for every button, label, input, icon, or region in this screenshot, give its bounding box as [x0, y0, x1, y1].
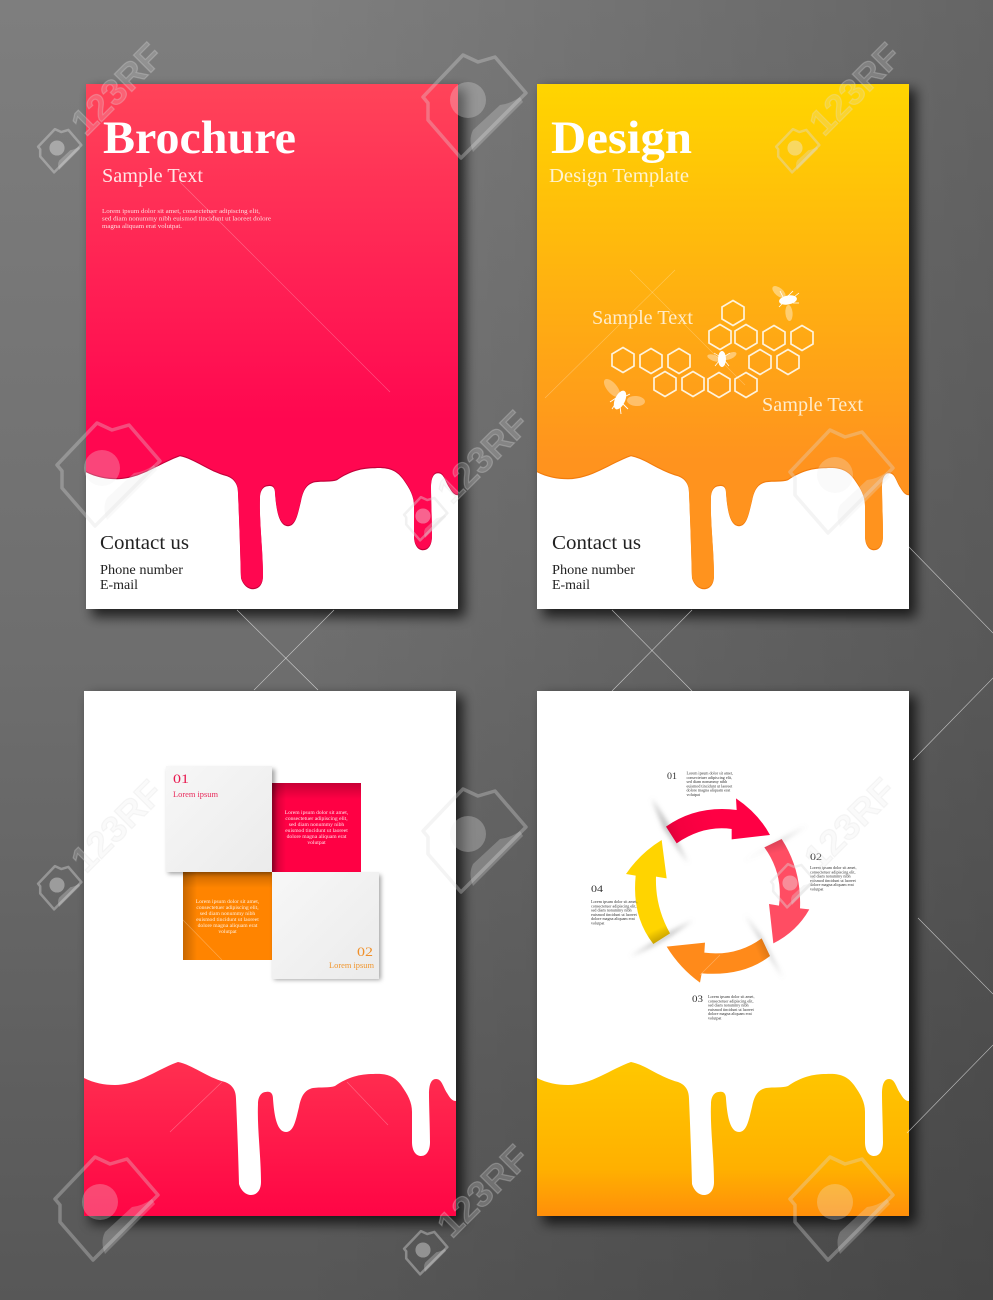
- step 03 label: Lorem ipsum dolor sit amet,: [708, 994, 755, 1000]
- step 03 label: sed diam nonummy nibh: [708, 1003, 749, 1008]
- panel: design cover: [537, 84, 909, 609]
- watermark text marks: 123RF: [801, 35, 909, 143]
- step 03 label: [692, 994, 755, 1020]
- step 01 label: volutpat: [686, 792, 701, 797]
- paper square 01: Lorem ipsum: [173, 789, 218, 799]
- pink square with text: euismod tincidunt ut laoreet: [285, 828, 348, 834]
- heading: Design: Design: [551, 112, 692, 164]
- step 03 label: volutpat: [708, 1016, 722, 1020]
- step 02 label: [810, 853, 857, 892]
- arrow 4 yellow: [626, 840, 670, 944]
- pink square with text: volutpat: [307, 840, 326, 846]
- step 02 label: Lorem ipsum dolor sit amet,: [810, 865, 857, 871]
- honeycomb: [612, 300, 813, 398]
- orange square with text: dolore magna aliquam erat: [198, 923, 258, 929]
- heading: Brochure: Brochure: [103, 112, 296, 164]
- step 02 label: volutpat: [810, 886, 824, 892]
- step 04 label: euismod tincidunt ut laoreet: [591, 912, 638, 917]
- contact block: Phone number: [100, 562, 184, 577]
- icon: bee centre: [706, 350, 738, 367]
- icon: bee lower left: [604, 379, 645, 414]
- intro paragraph: magna aliquam erat volutpat.: [102, 223, 182, 230]
- step 01 label: euismod tincidunt ut laoreet: [686, 783, 733, 788]
- panel: inner page with squares: [82, 691, 458, 1216]
- step 02 label: euismod tincidunt ut laoreet: [810, 878, 857, 883]
- orange square with text: volutpat: [218, 929, 237, 935]
- step 03 label: 03: [692, 995, 703, 1005]
- pink square with text: consectetuer adipiscing elit,: [285, 816, 348, 822]
- subheading: Design Template: Design Template: [549, 165, 689, 187]
- pink square with text: sed diam nonummy nibh: [289, 822, 344, 828]
- step 01 label: 01: [667, 772, 677, 782]
- step 02 label: consectetuer adipiscing elit,: [810, 869, 856, 875]
- contact block: E-mail: [552, 577, 590, 592]
- honey drips: [537, 84, 909, 589]
- pink square with text: Lorem ipsum dolor sit amet,: [285, 810, 349, 816]
- step 01 label: Lorem ipsum dolor sit amet,: [686, 770, 733, 776]
- intro paragraph: Lorem ipsum dolor sit amet, consectetuer adipiscing elit,: [102, 208, 260, 215]
- paper square 01: [166, 766, 275, 874]
- step 01 label: [667, 770, 733, 797]
- contact block: [552, 536, 640, 589]
- orange square with text: [183, 872, 272, 960]
- pink square with text: dolore magna aliquam erat: [287, 834, 347, 840]
- intro paragraph: [102, 208, 271, 230]
- arrow 2 coral: [764, 839, 809, 943]
- panel: brochure cover: [86, 84, 458, 609]
- orange square with text: Lorem ipsum dolor sit amet,: [196, 899, 260, 905]
- contact block: [100, 536, 188, 589]
- step 02 label: dolore magna aliquam erat: [810, 882, 855, 887]
- icon: bee top right: [772, 286, 800, 321]
- orange square with text: sed diam nonummy nibh: [200, 911, 255, 917]
- watermark egg marks: [55, 55, 893, 1260]
- watermark text marks: 123RF: [429, 403, 537, 511]
- contact block: Contact us: [100, 532, 189, 554]
- label: sample text upper: Sample Text: [592, 307, 693, 329]
- watermark text marks: 123RF: [63, 35, 171, 143]
- label: sample text lower: Sample Text: [762, 394, 863, 416]
- step 01 label: sed diam nonummy nibh: [686, 779, 727, 784]
- white drips over pink: [82, 691, 458, 1195]
- paper square 01: 01: [173, 771, 189, 786]
- subheading: Sample Text: Sample Text: [102, 165, 203, 187]
- intro paragraph: sed diam nonummy nibh euismod tincidunt ut laoreet dolore: [102, 216, 271, 222]
- cycle diagram: [626, 798, 809, 983]
- step 03 label: dolore magna aliquam erat: [708, 1011, 753, 1016]
- panel: inner page with cycle: [535, 691, 911, 1216]
- step 04 label: volutpat: [591, 920, 605, 926]
- card shadows: [90, 89, 916, 1224]
- arrow 3 orange: [667, 938, 770, 983]
- blade shadows: [635, 802, 797, 970]
- contact block: Contact us: [552, 532, 641, 554]
- step 04 label: [591, 885, 638, 926]
- step 01 label: dolore magna aliquam erat: [686, 788, 731, 793]
- step 04 label: Lorem ipsum dolor sit amet,: [591, 899, 638, 905]
- orange square with text: euismod tincidunt ut laoreet: [196, 917, 259, 923]
- step 03 label: consectetuer adipiscing elit,: [708, 998, 754, 1004]
- paper square 02: [272, 872, 381, 980]
- step 03 label: euismod tincidunt ut laoreet: [708, 1007, 755, 1012]
- paper square 02: Lorem ipsum: [329, 960, 374, 970]
- orange square with text: consectetuer adipiscing elit,: [196, 905, 259, 911]
- watermark text marks: 123RF: [63, 772, 171, 880]
- paper square 02: 02: [357, 944, 373, 959]
- step 01 label: consectetuer adipiscing elit,: [686, 775, 732, 781]
- step 04 label: 04: [591, 885, 603, 895]
- pink paint drips: [86, 84, 458, 589]
- step 02 label: 02: [810, 853, 822, 863]
- step 02 label: sed diam nonummy nibh: [810, 874, 851, 879]
- step 04 label: sed diam nonummy nibh: [591, 908, 632, 913]
- step 04 label: consectetuer adipiscing elit,: [591, 903, 637, 909]
- step 04 label: dolore magna aliquam erat: [591, 916, 636, 921]
- arrow 1 red: [666, 798, 770, 843]
- watermark text marks: 123RF: [796, 770, 904, 878]
- watermark text marks: 123RF: [429, 1137, 537, 1245]
- contact block: Phone number: [552, 562, 636, 577]
- pink square with text: [272, 783, 361, 872]
- white drips over orange: [535, 691, 911, 1195]
- contact block: E-mail: [100, 577, 138, 592]
